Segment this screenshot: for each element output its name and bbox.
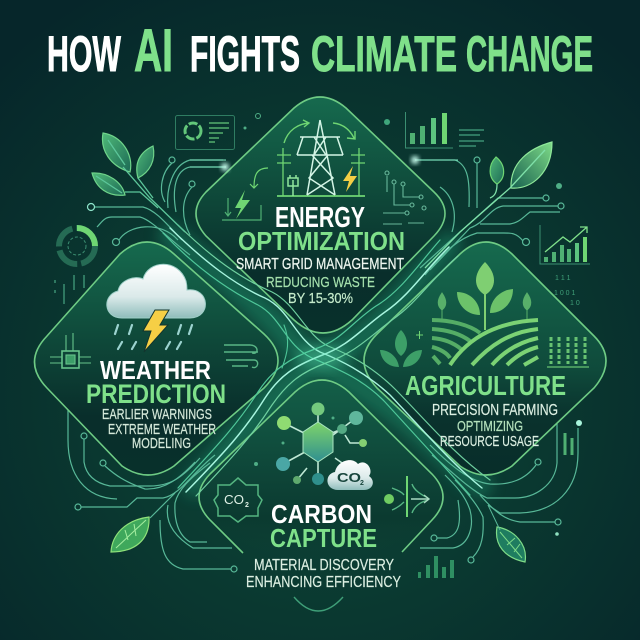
carbon capture outline — [199, 380, 443, 553]
heading: carbon capture: CARBON — [271, 499, 372, 529]
heading: carbon capture: CAPTURE — [270, 523, 377, 553]
icon: circuit traces — [383, 171, 426, 224]
text: carbon description: MATERIAL DISCOVERY — [254, 557, 394, 574]
circuit lines: upper right — [420, 157, 564, 275]
top glowing connectors — [190, 114, 582, 536]
heading: agriculture: AGRICULTURE — [405, 370, 566, 401]
icon: CO2 cloud: 2 — [360, 480, 364, 487]
text: weather description: EXTREME WEATHER — [108, 421, 216, 438]
icon: yellow lightning bolt — [343, 166, 357, 192]
binary digits: 1 1 1 — [555, 275, 571, 282]
title: AI — [134, 17, 173, 84]
carbon capture lower curve — [294, 597, 343, 611]
circuit lines: lower right — [420, 400, 578, 563]
panel: energy optimization — [196, 97, 445, 333]
panel: agriculture — [364, 242, 606, 475]
icon: CO2 badge — [214, 478, 262, 522]
text: agriculture description: PRECISION FARMING — [432, 402, 558, 419]
text: weather description: MODELING — [132, 435, 191, 452]
icon: CO2 cloud — [327, 460, 373, 490]
icon: CO2 badge: 2 — [245, 502, 249, 509]
bar chart: bottom — [418, 556, 454, 578]
heading: energy optimization: ENERGY — [275, 202, 365, 234]
glow behind flow bands — [170, 235, 480, 485]
icon: CO2 badge: CO — [224, 492, 244, 507]
title: FIGHTS — [190, 26, 300, 82]
panel: carbon capture — [199, 380, 443, 552]
text: weather description: EARLIER WARNINGS — [102, 406, 212, 423]
small bars: right — [565, 433, 572, 455]
text: energy description — [236, 256, 404, 307]
panel: weather prediction — [34, 242, 278, 475]
heading: weather prediction — [86, 355, 226, 409]
title — [47, 17, 593, 84]
title: CLIMATE — [311, 26, 457, 82]
central flowing lines — [163, 225, 490, 496]
small signal bars: left — [55, 275, 84, 304]
text: energy description: BY 15-30% — [288, 290, 353, 307]
icon: grid arrow and bolt — [222, 168, 268, 220]
icon: wind — [224, 345, 258, 368]
central glow — [298, 346, 346, 368]
growth chart: right — [540, 225, 590, 264]
icon: storm cloud — [107, 264, 205, 352]
binary digits: 1 0 0 1 — [554, 290, 576, 297]
heading: carbon capture — [270, 499, 377, 553]
icon: chip — [50, 333, 91, 368]
text: agriculture description: RESOURCE USAGE — [440, 433, 539, 450]
text: carbon description: ENHANCING EFFICIENCY — [246, 574, 401, 591]
bar chart: top right — [406, 112, 484, 148]
text: agriculture description: OPTIMIZING — [457, 418, 523, 435]
heading: energy optimization: OPTIMIZATION — [238, 226, 405, 256]
small dashboard panel — [176, 116, 234, 150]
heading: weather prediction: PREDICTION — [86, 379, 226, 409]
circuit lines: lower left — [68, 400, 237, 572]
leaf: bottom left — [111, 517, 149, 552]
leaves: upper right branch — [425, 142, 552, 268]
icon: crops and field — [432, 262, 538, 365]
binary digits — [554, 275, 580, 307]
icon: sprout — [380, 330, 423, 367]
circuit lines: upper left — [88, 157, 223, 255]
icon: molecule — [254, 402, 367, 485]
title: HOW — [47, 26, 121, 82]
icon: CO2 cloud: CO — [337, 470, 361, 485]
ring chart: left — [59, 228, 95, 264]
heading: energy optimization — [238, 202, 405, 256]
heading: weather prediction: WEATHER — [100, 355, 211, 385]
binary digits: 1 0 — [570, 300, 580, 307]
text: energy description: SMART GRID MANAGEMENT — [236, 256, 404, 273]
icon: filter arrow — [384, 476, 429, 517]
leaf: bottom right — [488, 505, 525, 562]
text: energy description: REDUCING WASTE — [266, 274, 375, 291]
text: weather description — [102, 406, 216, 452]
leaves: upper left branch — [92, 133, 185, 232]
icon: wheat — [547, 337, 589, 367]
icon: transmission tower — [277, 120, 365, 196]
text: carbon description — [246, 557, 401, 591]
text: agriculture description — [432, 402, 558, 450]
